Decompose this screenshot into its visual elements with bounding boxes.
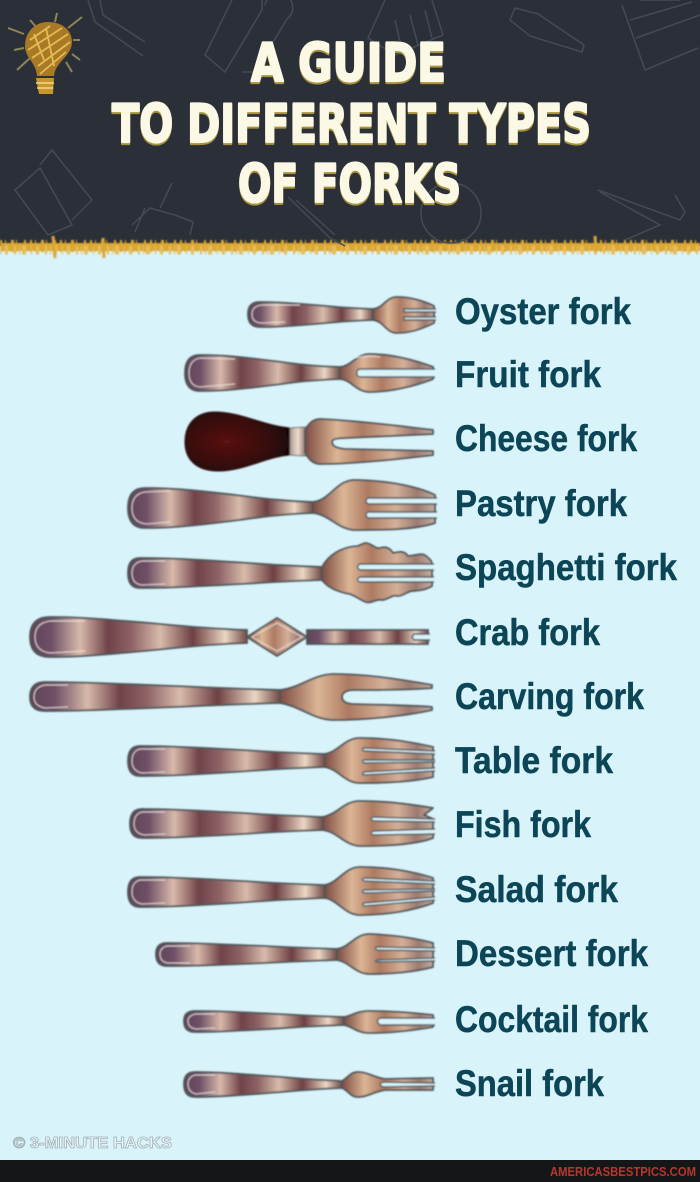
- fork: table: [128, 738, 435, 783]
- footer bar: [0, 1160, 700, 1182]
- fork: crab: [30, 617, 430, 657]
- label: carving fork: Carving fork: [455, 676, 644, 717]
- label: pastry fork: Pastry fork: [455, 483, 627, 524]
- fork: spaghetti: [128, 543, 434, 602]
- title: A GUIDE: [251, 33, 446, 94]
- fork: fish: [130, 801, 435, 846]
- fork: carving: [30, 674, 432, 720]
- watermark: 3-minute hacks: © 3-MINUTE HACKS: [13, 1135, 172, 1152]
- label: dessert fork: Dessert fork: [455, 933, 648, 974]
- background craft tool outlines: [15, 0, 700, 246]
- header banner: [0, 0, 700, 258]
- label: cocktail fork: Cocktail fork: [455, 999, 648, 1040]
- label: fish fork: Fish fork: [455, 804, 591, 845]
- fork: cocktail: [184, 1011, 435, 1033]
- label: oyster fork: Oyster fork: [455, 291, 631, 332]
- fork: cheese: [185, 412, 433, 471]
- icon: light bulb: [8, 13, 82, 94]
- fork: salad: [128, 867, 435, 915]
- torn yellow edge: [0, 236, 700, 258]
- fork: oyster: [248, 297, 436, 333]
- fork: snail: [184, 1072, 435, 1097]
- label: fruit fork: Fruit fork: [455, 354, 601, 395]
- label: cheese fork: Cheese fork: [455, 418, 637, 459]
- label: spaghetti fork: Spaghetti fork: [455, 547, 677, 588]
- label: salad fork: Salad fork: [455, 869, 618, 910]
- title: [112, 33, 591, 215]
- fork: pastry: [128, 480, 437, 530]
- title: OF FORKS: [238, 154, 461, 215]
- label: table fork: Table fork: [455, 740, 613, 781]
- fork: dessert: [156, 934, 435, 974]
- label: crab fork: Crab fork: [455, 612, 600, 653]
- fork: fruit: [185, 354, 435, 392]
- label: snail fork: Snail fork: [455, 1063, 604, 1104]
